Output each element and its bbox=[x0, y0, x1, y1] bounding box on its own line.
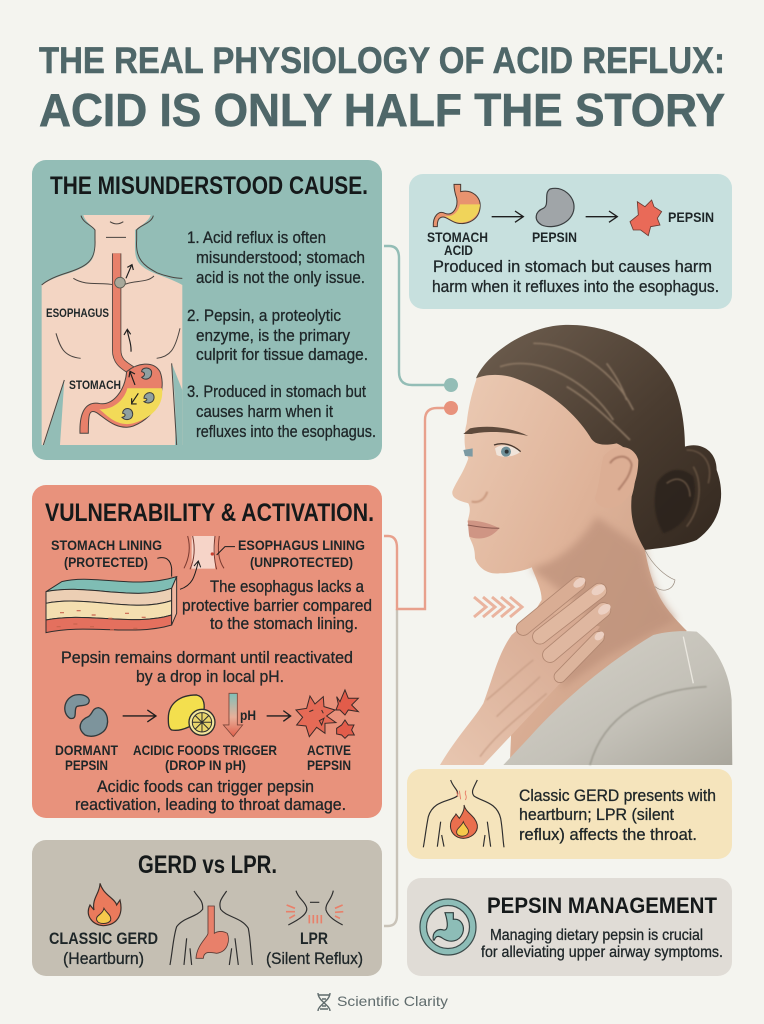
pathway labels: STOMACH bbox=[427, 229, 488, 245]
labels: GERD and LPR: (Heartburn) bbox=[63, 949, 144, 968]
management text: Managing dietary pepsin is crucial bbox=[490, 927, 703, 944]
labels: process steps: ACTIVE bbox=[307, 742, 351, 758]
labels: process steps: ACIDIC FOODS TRIGGER bbox=[133, 742, 277, 758]
labels: GERD and LPR bbox=[49, 929, 363, 968]
loose hair strands bbox=[645, 550, 675, 590]
labels: process steps: PEPSIN bbox=[307, 757, 351, 773]
icon: stomach badge bbox=[420, 899, 476, 955]
body text: dormant pepsin bbox=[61, 648, 353, 686]
icon: torso with flame bbox=[423, 780, 504, 847]
numbered list: 3. Produced in stomach but bbox=[187, 382, 366, 401]
labels: GERD and LPR: (Silent Reflux) bbox=[266, 949, 363, 968]
torso diagram with esophagus and stomach bbox=[42, 215, 182, 445]
labels: GERD and LPR: CLASSIC GERD bbox=[49, 929, 158, 948]
numbered list bbox=[187, 228, 376, 441]
hair bbox=[476, 325, 721, 550]
body text: protective barrier: protective barrier compared bbox=[182, 596, 372, 615]
heading: pepsin management: PEPSIN MANAGEMENT bbox=[487, 893, 718, 918]
heading: vulnerability: VULNERABILITY & ACTIVATION. bbox=[45, 499, 374, 527]
labels: linings: ESOPHAGUS LINING bbox=[238, 537, 365, 553]
numbered list: 1. Acid reflux is often bbox=[187, 228, 326, 247]
label: esophagus: ESOPHAGUS bbox=[46, 306, 109, 320]
numbered list: refluxes into the esophagus. bbox=[196, 422, 376, 441]
numbered list: misunderstood; stomach bbox=[196, 248, 365, 267]
pathway labels bbox=[427, 209, 714, 258]
stomach lining and esophagus wall illustration bbox=[46, 536, 235, 633]
panel: classic GERD note bbox=[407, 769, 732, 859]
note text: reflux) affects the throat. bbox=[519, 825, 697, 844]
pathway description bbox=[432, 257, 719, 296]
footer: scientific clarity brand bbox=[318, 993, 448, 1011]
activation process icons bbox=[65, 690, 358, 738]
panel: pepsin management bbox=[407, 878, 732, 976]
icons: flame, torso, throat bbox=[88, 883, 343, 965]
chevron arrows bbox=[474, 597, 522, 617]
heading: GERD vs LPR: GERD vs LPR. bbox=[138, 851, 277, 879]
title bbox=[39, 40, 725, 136]
body text: throat damage bbox=[75, 777, 346, 814]
note text: heartburn; LPR (silent bbox=[519, 805, 674, 824]
numbered list: 2. Pepsin, a proteolytic bbox=[187, 306, 341, 325]
labels: process steps: PEPSIN bbox=[65, 757, 108, 773]
labels: process steps: DORMANT bbox=[55, 742, 118, 758]
body text: protective barrier bbox=[182, 577, 372, 633]
labels: process steps bbox=[55, 742, 351, 773]
body text: throat damage: reactivation, leading to throat damage. bbox=[75, 795, 346, 814]
title: ACID IS ONLY HALF THE STORY bbox=[39, 84, 725, 136]
head and neck bbox=[452, 360, 687, 760]
numbered list: enzyme, is the primary bbox=[196, 326, 350, 345]
management text bbox=[481, 927, 723, 961]
pathway description: harm when it refluxes into the esophagus. bbox=[432, 277, 719, 296]
management text: for alleviating upper airway symptoms. bbox=[481, 944, 723, 961]
ear bbox=[595, 447, 638, 508]
photo: woman in profile holding her throat bbox=[440, 325, 732, 765]
icon: dna bbox=[318, 993, 330, 1011]
numbered list: causes harm when it bbox=[196, 402, 333, 421]
pathway labels: PEPSIN bbox=[532, 229, 577, 245]
body text: throat damage: Acidic foods can trigger pepsin bbox=[97, 777, 314, 796]
pH label: pH bbox=[240, 707, 256, 723]
body text: protective barrier: The esophagus lacks a bbox=[210, 577, 364, 596]
label: stomach: STOMACH bbox=[69, 378, 121, 392]
labels: GERD and LPR: LPR bbox=[300, 929, 328, 948]
panel: pepsin pathway bbox=[409, 174, 732, 309]
pathway description: Produced in stomach but causes harm bbox=[433, 257, 712, 276]
labels: linings: (UNPROTECTED) bbox=[250, 554, 353, 570]
panel: the misunderstood cause bbox=[32, 160, 382, 460]
heading: misunderstood cause: THE MISUNDERSTOOD CAUSE. bbox=[50, 172, 368, 200]
body text: dormant pepsin: by a drop in local pH. bbox=[136, 667, 284, 686]
numbered list: culprit for tissue damage. bbox=[196, 345, 368, 364]
body text: dormant pepsin: Pepsin remains dormant until reactivated bbox=[61, 648, 353, 667]
panel: vulnerability and activation bbox=[32, 485, 382, 818]
body text: protective barrier: to the stomach lining. bbox=[210, 614, 358, 633]
note text bbox=[519, 786, 716, 844]
neck and jaw shading bbox=[530, 517, 677, 690]
facial features bbox=[463, 427, 528, 539]
connector lines bbox=[384, 246, 458, 926]
pathway labels: PEPSIN bbox=[668, 209, 714, 225]
hand on throat bbox=[440, 576, 613, 765]
labels: linings bbox=[51, 537, 365, 570]
pathway icons bbox=[433, 184, 662, 236]
labels: linings: (PROTECTED) bbox=[64, 554, 148, 570]
labels: process steps: (DROP IN pH) bbox=[165, 757, 246, 773]
footer: scientific clarity brand: Scientific Clarity bbox=[337, 993, 448, 1009]
labels: linings: STOMACH LINING bbox=[51, 537, 162, 553]
pathway labels: ACID bbox=[444, 242, 473, 258]
panel: GERD vs LPR bbox=[32, 840, 382, 976]
shirt bbox=[503, 631, 732, 765]
note text: Classic GERD presents with bbox=[519, 786, 716, 805]
numbered list: acid is not the only issue. bbox=[196, 268, 365, 287]
